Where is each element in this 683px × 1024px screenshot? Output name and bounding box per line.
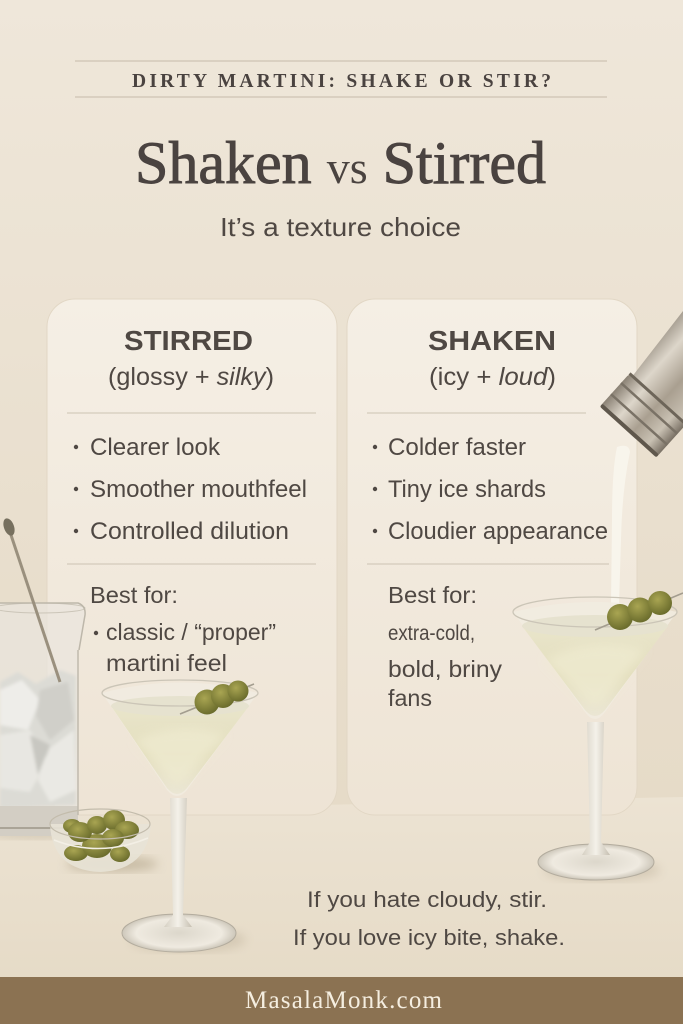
subtitle: It’s a texture choice [220,212,461,242]
stirred bullet list: Smoother mouthfeel [90,476,307,503]
header kicker: DIRTY MARTINI: SHAKE OR STIR? [132,71,551,92]
shaken bullet list: Colder faster [388,434,526,461]
shaken bullet list [373,434,608,545]
shaken best for: fans [388,685,432,711]
shaken best for: bold, briny [388,656,503,682]
icon: shaken martini glass [513,591,683,881]
closing advice text: If you love icy bite, shake. [293,925,565,950]
stirred bullet list [74,434,307,545]
shaken heading: SHAKEN [428,325,556,356]
panel: shaken [347,299,637,815]
footer band [0,977,683,1024]
stirred bullet list: Clearer look [90,434,221,461]
icon: cocktail shaker [591,205,683,465]
closing advice text [293,887,565,950]
shaken best for: Best for: [388,582,477,608]
stirred bullet list: Controlled dilution [90,518,289,545]
icon: bowl of olives [50,809,158,872]
stirred best for: classic / “proper” [106,619,276,645]
stirred heading: STIRRED [124,325,253,356]
footer site name: MasalaMonk.com [245,987,443,1014]
shaken best for: extra-cold, [388,622,475,645]
stirred best for: Best for: [90,582,178,608]
stirred best for [90,582,276,676]
shaken best for [388,582,503,711]
shaken bullet list: Tiny ice shards [388,476,546,503]
closing advice text: If you hate cloudy, stir. [307,887,547,912]
table surface [0,797,683,977]
shaken bullet list: Cloudier appearance [388,518,608,545]
title: Shaken vs Stirred [135,130,546,196]
arrow: poured stream [611,446,630,605]
icon: mixing glass with ice and spoon [0,517,95,839]
icon: stirred martini glass [102,680,258,952]
shaken subheading: (icy + loud) [429,363,556,391]
stirred best for: martini feel [106,650,227,676]
panel: stirred [47,299,337,815]
stirred subheading: (glossy + silky) [108,363,274,391]
